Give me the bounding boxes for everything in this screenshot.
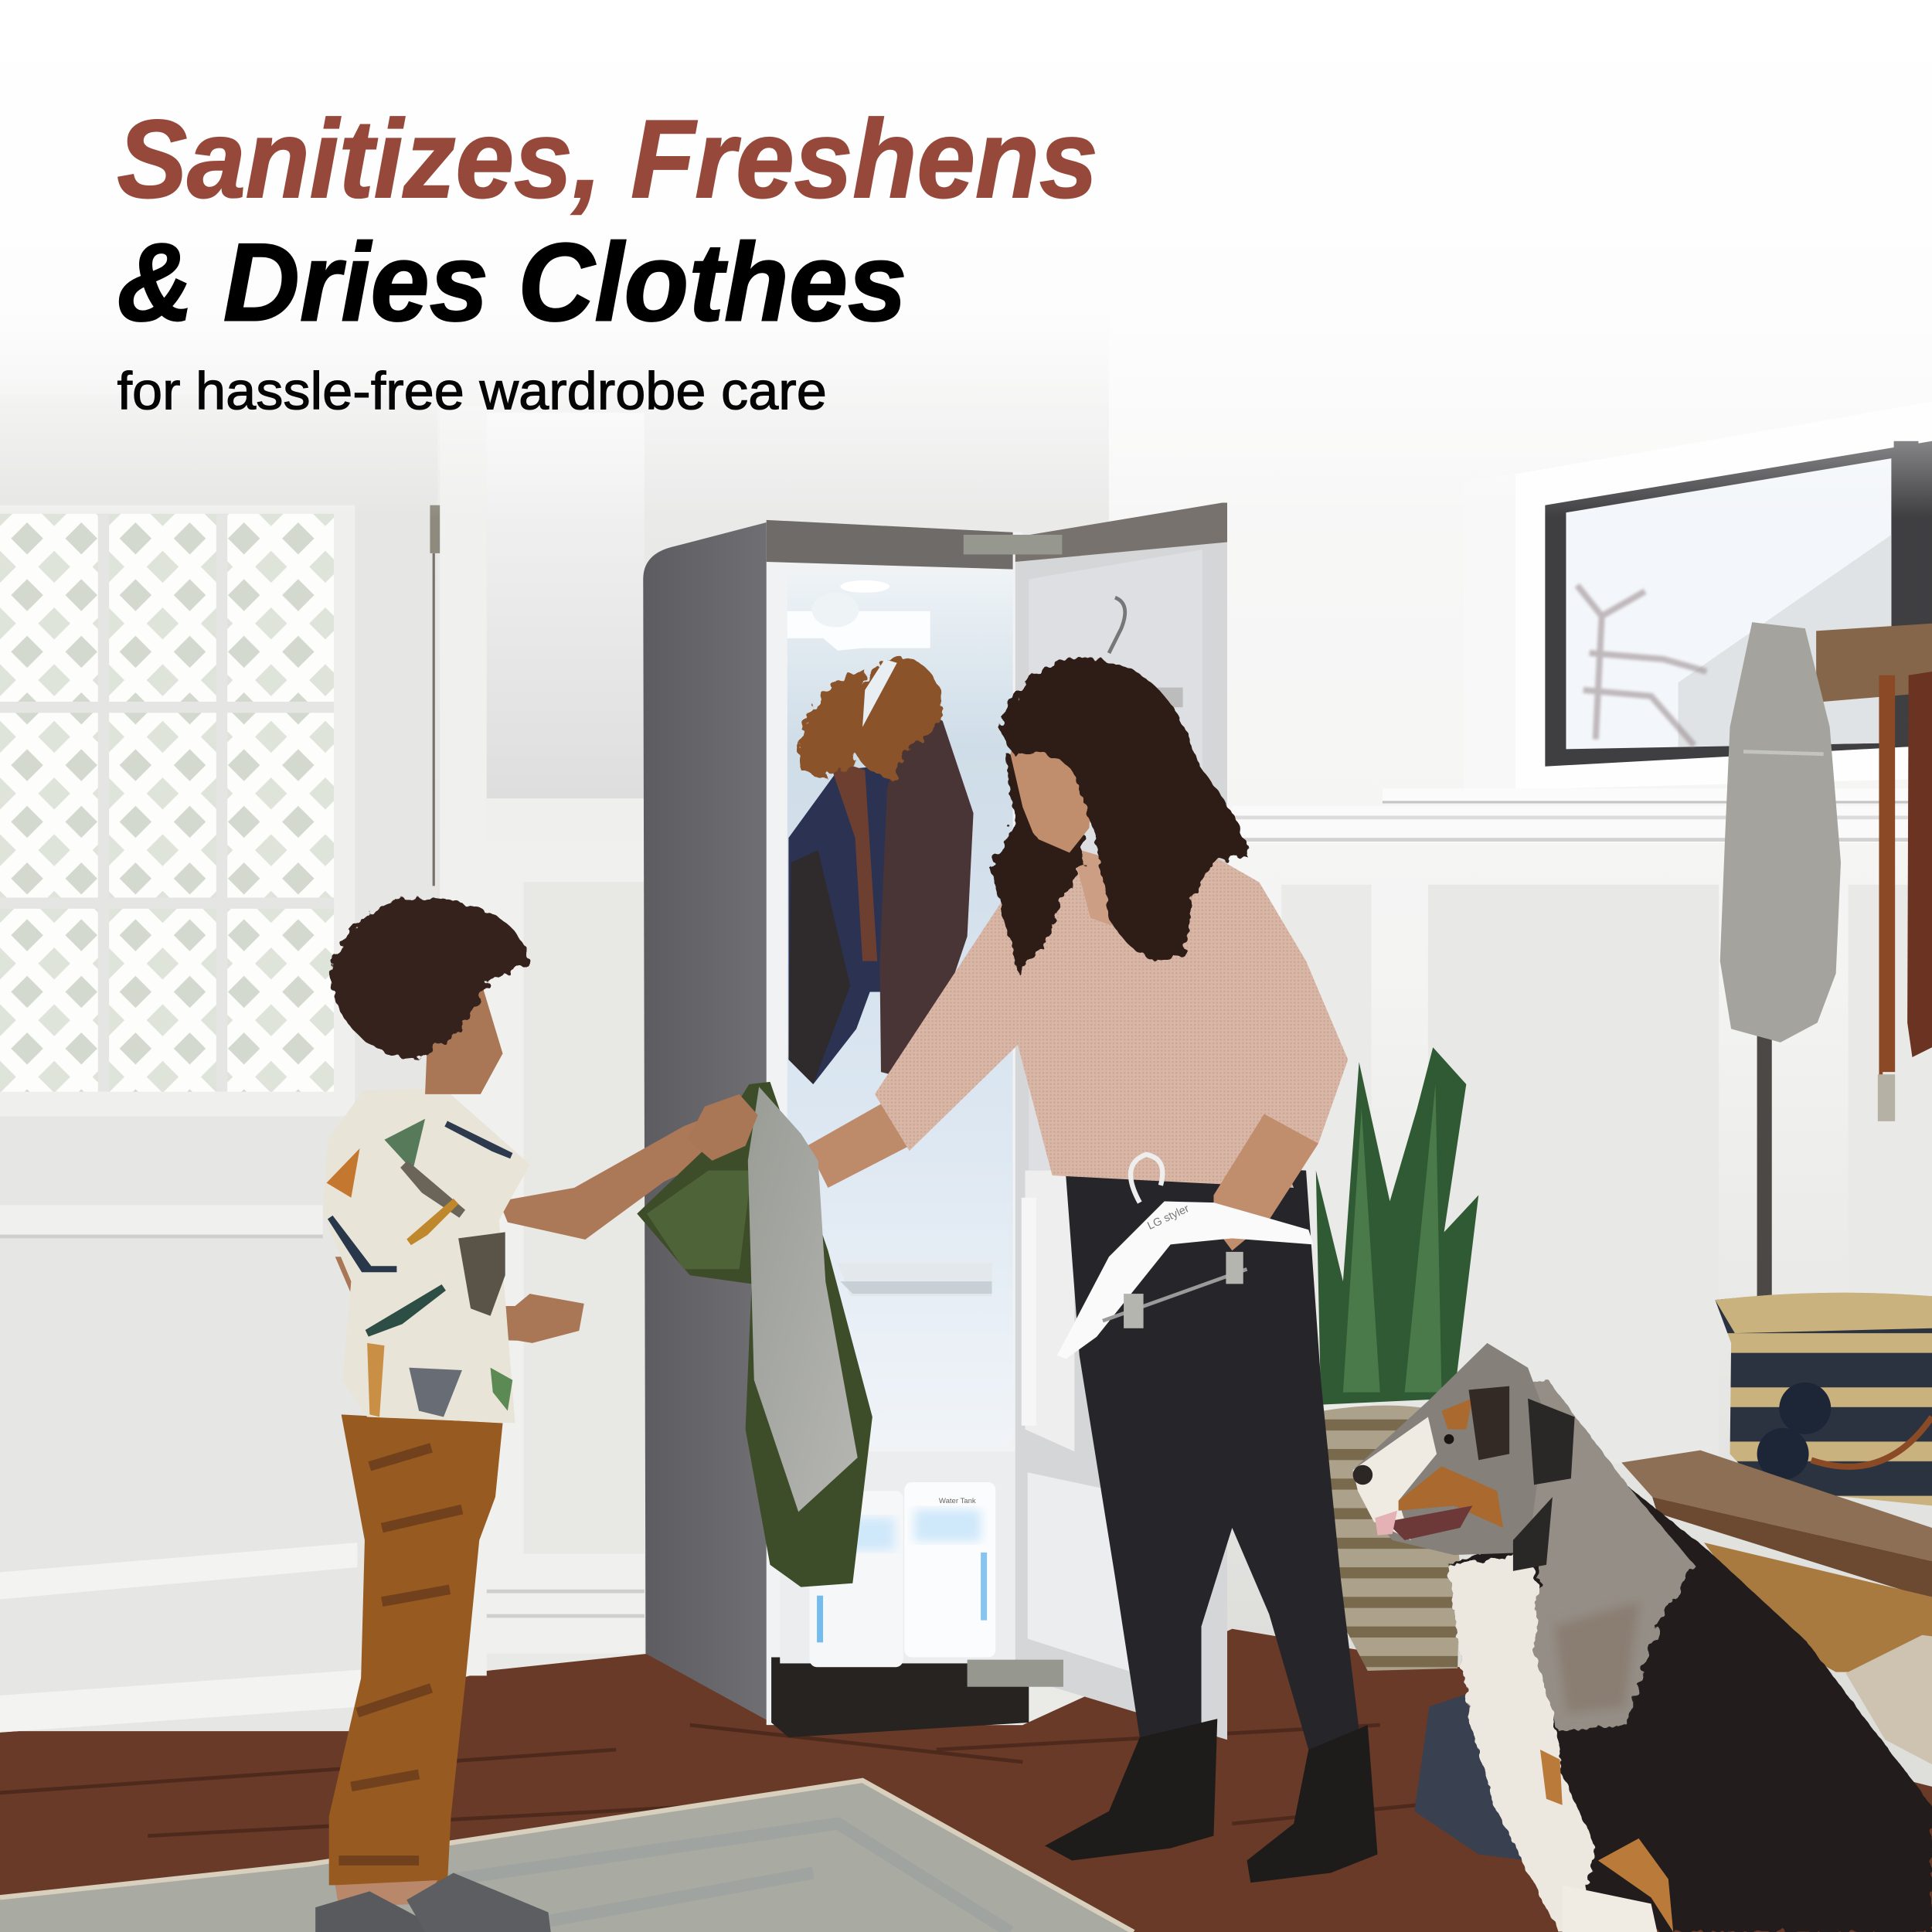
sweater — [875, 843, 1348, 1188]
door window — [0, 505, 355, 1117]
door with lattice window — [0, 394, 487, 1733]
white chest — [1447, 1553, 1596, 1932]
chest — [1072, 848, 1124, 927]
near arm — [499, 1109, 740, 1240]
legs — [1065, 1158, 1360, 1750]
grey mane — [1497, 1378, 1694, 1731]
face — [425, 988, 503, 1094]
clothing care cabinet — [643, 503, 1227, 1740]
green garment — [637, 1082, 872, 1587]
cabinet interior — [780, 572, 1016, 1663]
face — [1010, 733, 1090, 852]
far arm — [335, 1257, 584, 1343]
shirt — [323, 1088, 530, 1423]
wainscoting right — [1232, 806, 1932, 1464]
bench — [1621, 1451, 1932, 1672]
hinges — [964, 535, 1063, 1687]
water tanks: Water Tank — [939, 1497, 976, 1505]
white hanger: LG styler — [1145, 1202, 1191, 1233]
socks and legs — [335, 1880, 437, 1907]
rug — [0, 1781, 1134, 1932]
cabinet body — [643, 520, 1029, 1737]
dark bag on floor — [1414, 1694, 1528, 1861]
shoes — [315, 1891, 446, 1932]
nose — [1353, 1465, 1372, 1485]
lower white patch — [1563, 1885, 1657, 1932]
dog — [1353, 1343, 1932, 1932]
boots — [1045, 1719, 1217, 1861]
dark head patches — [1469, 1386, 1509, 1460]
dog body — [1447, 1487, 1932, 1932]
woman — [807, 658, 1378, 1883]
fur collar — [800, 658, 943, 781]
striped cushion — [1845, 1635, 1932, 1764]
trousers — [329, 1414, 503, 1885]
tan patch — [1598, 1838, 1673, 1932]
heading: Sanitizes, Freshens: Sanitizes, Freshens — [117, 97, 1098, 221]
eye — [1444, 1434, 1454, 1444]
wainscoting left — [487, 413, 645, 1654]
leather sleeve — [879, 707, 974, 1082]
subheading: for hassle-free wardrobe care — [117, 361, 827, 420]
woven basket — [1304, 1406, 1460, 1671]
plaid lining — [828, 758, 877, 961]
back hair — [1004, 752, 1084, 918]
title block fade — [0, 0, 1932, 518]
boy hand — [688, 1094, 758, 1161]
raised forearm — [1213, 1114, 1318, 1250]
tan cheek — [1399, 1466, 1503, 1528]
woven bag — [1715, 1293, 1932, 1505]
plant in basket — [1304, 1047, 1478, 1671]
white hanger — [1057, 1155, 1314, 1359]
hair — [991, 658, 1247, 974]
plant leaves — [1316, 1047, 1478, 1405]
water tanks — [810, 1482, 995, 1667]
reaching forearm — [807, 1099, 910, 1188]
muzzle — [1353, 1417, 1437, 1540]
mouth — [1386, 1505, 1472, 1540]
dog head — [1353, 1343, 1546, 1555]
boy — [315, 897, 740, 1932]
open door — [1015, 503, 1227, 1740]
navy jacket body — [788, 764, 902, 1084]
coat stand with scarf and strap — [1720, 622, 1932, 1300]
right window — [1383, 402, 1932, 804]
curly hair — [330, 897, 530, 1060]
floor — [0, 1629, 1932, 1932]
jacket on hanger — [788, 658, 974, 1084]
heading: Dries Clothes: & Dries Clothes — [117, 221, 906, 345]
